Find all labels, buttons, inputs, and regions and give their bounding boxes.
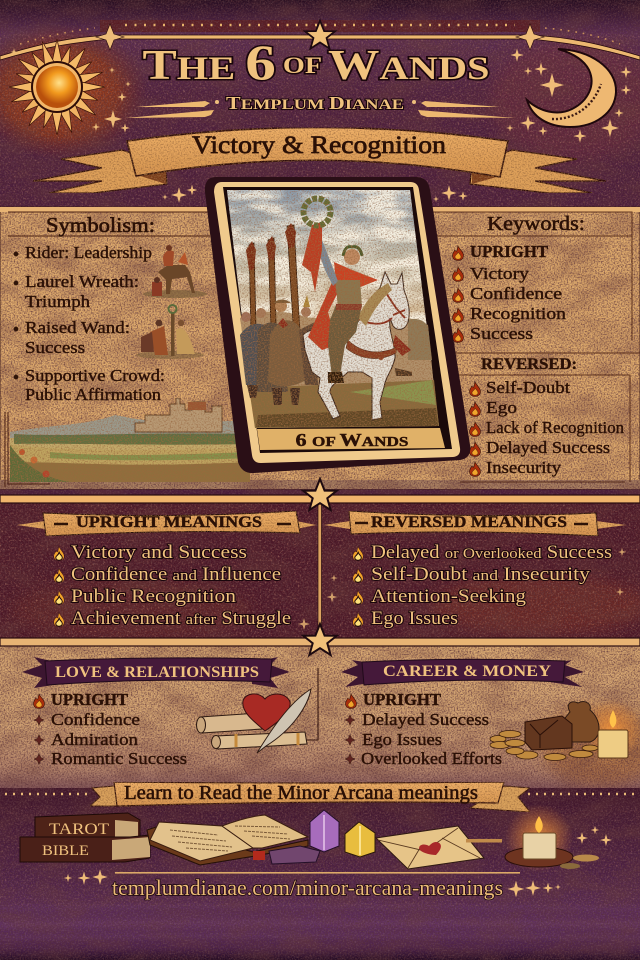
header panel xyxy=(0,20,640,160)
top ornaments xyxy=(20,21,620,50)
symbolism list: Triumph xyxy=(25,292,91,311)
icon: crescent moon xyxy=(506,48,632,143)
title: THE 6 xyxy=(142,34,270,90)
heading: keywords: Keywords: xyxy=(487,213,585,235)
love list: Admiration xyxy=(51,730,138,749)
icon: rider vignette xyxy=(143,245,207,298)
footer sparkle stars xyxy=(64,826,612,897)
small stars near sun xyxy=(10,48,131,133)
banner: career and money xyxy=(341,659,584,687)
banner: reversed meanings: REVERSED MEANINGS xyxy=(371,514,567,531)
scarf xyxy=(302,222,322,292)
heading: symbolism: Symbolism: xyxy=(46,213,155,237)
reversed keywords: Self-Doubt xyxy=(486,378,570,397)
reversed keywords xyxy=(470,378,624,477)
icon: lit candle xyxy=(505,804,599,872)
symbolism list: Public Affirmation xyxy=(25,385,161,404)
panel: keywords xyxy=(430,212,640,482)
icon: tarot and bible books: TAROT xyxy=(49,821,109,838)
star divider top xyxy=(303,479,337,510)
horse xyxy=(303,272,412,420)
heading: reversed: REVERSED: xyxy=(481,356,577,373)
symbolism list: Raised Wand: xyxy=(25,318,130,337)
icon: open book xyxy=(147,815,308,865)
rider xyxy=(308,231,378,383)
icon: chest coins and candle xyxy=(490,700,640,760)
icon: wand vignette xyxy=(136,305,204,359)
upright meanings list: Achievement after Struggle xyxy=(71,609,291,629)
reversed keywords: Insecurity xyxy=(486,458,562,477)
panel: symbolism xyxy=(5,212,250,487)
wreath xyxy=(304,198,330,226)
upright keywords: Recognition xyxy=(470,304,566,323)
card label: 6 OF W ANDS xyxy=(296,430,409,450)
reversed meanings list: Ego Issues xyxy=(371,609,458,629)
upright keywords: UPRIGHT xyxy=(470,242,548,261)
icon: envelope xyxy=(376,826,484,869)
main banner: Victory & Recognition xyxy=(192,132,447,159)
career list: Delayed Success xyxy=(362,710,489,729)
upright meanings list: Confidence and Influence xyxy=(71,565,281,585)
banner: upright meanings: UPRIGHT MEANINGS xyxy=(76,514,262,531)
upright meanings list: Public Recognition xyxy=(71,587,236,607)
main banner xyxy=(33,128,606,193)
reversed meanings list: Attention-Seeking xyxy=(371,587,526,607)
banner: upright meanings xyxy=(17,511,316,536)
love divider line xyxy=(306,668,318,740)
reversed keywords: Delayed Success xyxy=(486,438,610,457)
subtitle: TEMPLUM DIANAE xyxy=(226,93,404,113)
panel: footer xyxy=(0,788,640,960)
symbolism list: Supportive Crowd: xyxy=(25,366,165,385)
panel: meanings xyxy=(0,503,640,640)
meanings sparkle xyxy=(298,548,626,630)
icon: heart with scrolls and quill xyxy=(196,689,311,753)
banner: love and relationships: LOVE & RELATIONSHIPS xyxy=(55,664,259,681)
banner: learn: Learn to Read the Minor Arcana meanings xyxy=(124,783,478,804)
symbolism list xyxy=(14,243,165,404)
reversed meanings list xyxy=(353,543,612,629)
upright meanings list xyxy=(54,543,291,629)
top gold arc xyxy=(0,35,640,60)
crowd xyxy=(240,295,318,405)
upright keywords xyxy=(452,242,566,343)
career list: Overlooked Efforts xyxy=(361,749,502,768)
love list: Confidence xyxy=(51,710,140,729)
reversed keywords: Ego xyxy=(486,398,517,417)
icon: crystals xyxy=(253,810,375,864)
panel: parchment band xyxy=(0,207,640,489)
upright keywords: Confidence xyxy=(470,284,562,303)
upright keywords: Victory xyxy=(470,264,530,283)
career list: UPRIGHT xyxy=(363,690,441,709)
subtitle xyxy=(125,93,515,118)
banner: reversed meanings xyxy=(324,511,626,536)
upright meanings list: Victory and Success xyxy=(71,543,247,563)
panel: love and career xyxy=(0,646,640,791)
tarot card xyxy=(205,177,470,473)
title: W xyxy=(328,43,379,89)
career list: Ego Issues xyxy=(362,730,442,749)
title: OF xyxy=(276,53,328,78)
symbolism list: Laurel Wreath: xyxy=(25,272,139,291)
reversed meanings list: Delayed or Overlooked Success xyxy=(371,543,612,563)
card picture xyxy=(225,188,440,428)
reversed meanings list: Self-Doubt and Insecurity xyxy=(371,565,591,585)
love list: UPRIGHT xyxy=(51,690,128,709)
symbolism list: Success xyxy=(25,338,85,357)
parchment top trim xyxy=(0,207,640,212)
banner: learn xyxy=(90,782,530,812)
love list: Romantic Success xyxy=(51,749,187,768)
banner: career and money: CAREER & MONEY xyxy=(383,663,551,680)
title: ANDS xyxy=(379,51,489,87)
banner: love and relationships xyxy=(22,657,290,688)
website url: templumdianae.com/minor-arcana-meanings xyxy=(112,875,503,900)
landscape xyxy=(10,398,250,482)
love list xyxy=(34,690,187,768)
wands xyxy=(249,225,300,338)
career list xyxy=(345,690,502,768)
reversed keywords: Lack of Recognition xyxy=(486,418,624,437)
footer dots xyxy=(5,793,636,795)
icon: sun xyxy=(9,39,105,135)
star clusters beside card xyxy=(162,185,468,203)
upright keywords: Success xyxy=(470,324,533,343)
gold divider band xyxy=(0,495,640,646)
icon: tarot and bible books xyxy=(20,813,150,862)
symbolism list: Rider: Leadership xyxy=(25,243,152,262)
icon: tarot and bible books: BIBLE xyxy=(42,843,89,859)
star divider bottom xyxy=(303,624,337,655)
